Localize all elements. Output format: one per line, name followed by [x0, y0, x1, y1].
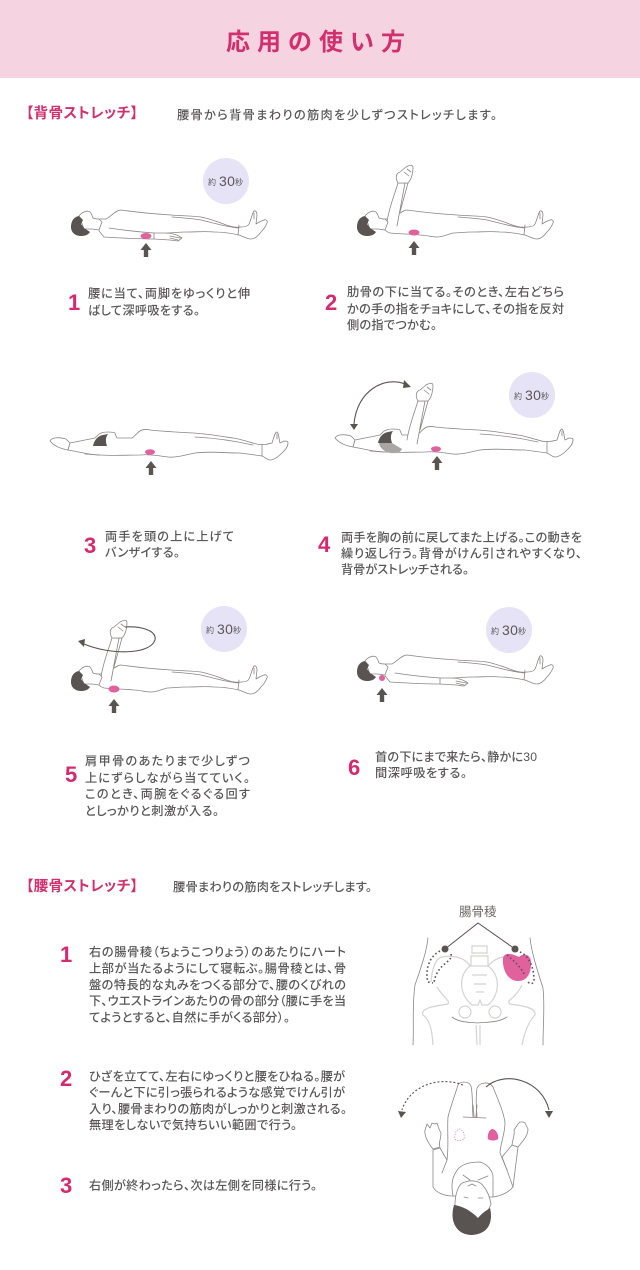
step 4 text: 両手を胸の前に戻してまた上げる。この動きを [341, 530, 582, 544]
step 4 text: 4 [318, 532, 331, 557]
body outline [413, 938, 544, 1045]
step 4 figure: 約 [514, 391, 522, 401]
waist step 1 text: 右の腸骨稜（ちょうこつりょう）のあたりにハート [89, 944, 346, 959]
section heading: back stretch [26, 104, 497, 122]
step 2 text [325, 284, 564, 332]
step 2 text: 肋骨の下に当てる。そのとき、左右どちら [347, 284, 564, 299]
waist step 1 text [60, 942, 346, 1024]
waist step 3 text [60, 1173, 317, 1198]
waist step 1 text: 上部が当たるようにして寝転ぶ。腸骨稜とは、骨 [89, 960, 346, 976]
step 4 text: 繰り返し行う。背骨がけん引されやすくなり、 [341, 546, 582, 560]
waist step 2 text [60, 1066, 347, 1132]
body [433, 1082, 513, 1197]
step 5 text: 5 [65, 762, 77, 787]
waist step 1 text: 下、ウエストラインあたりの骨の部分（腰に手を当 [89, 993, 346, 1008]
step 1 text: 腰に当て、両脚をゆっくりと伸 [88, 286, 250, 300]
waist step 2 text: 入り、腰骨まわりの筋肉がしっかりと刺激される。 [89, 1101, 347, 1116]
section heading: waist stretch [26, 878, 372, 895]
step 5 figure: 30 [217, 621, 233, 637]
pink heart [503, 954, 531, 981]
landmark dots [442, 946, 448, 952]
section heading: waist stretch: 【腰骨ストレッチ】 [26, 878, 138, 895]
waist step 1 text: てようとすると、自然に手がくる部分）。 [88, 1010, 290, 1024]
left hand [425, 1123, 441, 1149]
step 4 figure [335, 372, 573, 470]
step 6 figure: 秒 [518, 626, 526, 636]
pink marks [488, 1129, 498, 1140]
waist step 1 text: 盤の特長的な丸みをつくる部分で、腰のくびれの [89, 977, 346, 992]
waist step 2 text: 2 [60, 1066, 72, 1091]
step 3 text: 3 [84, 533, 96, 558]
step 4 figure: 秒 [541, 391, 549, 401]
step 5 text: としっかりと刺激が入る。 [85, 803, 219, 818]
step 2 figure [357, 165, 553, 255]
waist step 2 text: ぐーんと下に引っ張られるような感覚でけん引が [89, 1084, 345, 1100]
arrow: arm rotation [78, 627, 155, 652]
dashed arrow [402, 1082, 463, 1110]
step 4 figure: 30 [525, 387, 541, 403]
step 4 text [318, 530, 582, 576]
step 1 figure: 秒 [235, 177, 243, 187]
face [455, 1181, 491, 1220]
leader lines [445, 923, 515, 949]
step 3 figure [50, 429, 288, 475]
solid arrow [486, 1079, 549, 1110]
pelvis bones [423, 946, 535, 1045]
step 1 text [68, 286, 250, 318]
waist step 3 text: 3 [60, 1173, 72, 1198]
section heading: waist stretch: 腰骨まわりの筋肉をストレッチします。 [173, 879, 372, 894]
step 2 text: かの手の指をチョキにして、その指を反対 [347, 301, 564, 316]
step 3 text [84, 528, 234, 560]
waist step 2 text: ひざを立てて、左右にゆっくりと腰をひねる。腰が [89, 1068, 345, 1084]
step 5 text: このとき、両腕をぐるぐる回す [85, 787, 250, 801]
right hand [512, 1122, 528, 1147]
step 6 text: 間深呼吸をする。 [375, 766, 467, 780]
section heading: back stretch: 【背骨ストレッチ】 [26, 104, 138, 122]
arrow: arms arc [350, 380, 411, 430]
hair [453, 1205, 491, 1235]
step 1 text: ばして深呼吸をする。 [88, 304, 200, 318]
step 6 figure: 30 [502, 622, 518, 638]
label: iliac crest: 腸骨稜 [459, 905, 497, 919]
step 6 text: 6 [348, 755, 360, 780]
title band [0, 0, 640, 78]
figure: twisting from above [398, 1079, 553, 1235]
title: 応用の使い方 [226, 29, 412, 56]
waist step 1 text: 1 [60, 942, 72, 967]
waist step 2 text: 無理をしないで気持ちいい範囲で行う。 [89, 1117, 297, 1132]
step 1 figure: 約 [208, 177, 216, 187]
step 1 figure: 30 [219, 173, 235, 189]
step 2 text: 2 [325, 290, 337, 315]
step 6 text: 首の下にまで来たら、静かに30 [375, 749, 537, 764]
step 5 figure [71, 606, 267, 713]
step 3 text: 両手を頭の上に上げて [105, 528, 234, 544]
step 5 text [65, 753, 250, 818]
step 1 text: 1 [68, 290, 80, 315]
waist step 3 text: 右側が終わったら、次は左側を同様に行う。 [89, 1178, 317, 1192]
step 6 figure: 約 [491, 626, 499, 636]
step 6 text [348, 749, 537, 780]
step 6 figure [357, 607, 553, 702]
pelvis diagram [413, 905, 544, 1045]
step 2 text: 側の指でつかむ。 [347, 317, 437, 332]
step 3 text: バンザイする。 [105, 546, 180, 560]
step 4 text: 背骨がストレッチされる。 [341, 562, 469, 576]
section heading: back stretch: 腰骨から背骨まわりの筋肉を少しずつストレッチします。 [177, 107, 497, 122]
step 5 text: 肩甲骨のあたりまで少しずつ [85, 753, 250, 768]
step 5 text: 上にずらしながら当てていく。 [85, 770, 250, 785]
step 5 figure: 秒 [233, 625, 241, 635]
dotted crest lines [427, 951, 534, 984]
step 5 figure: 約 [206, 625, 214, 635]
step 1 figure [71, 158, 267, 257]
